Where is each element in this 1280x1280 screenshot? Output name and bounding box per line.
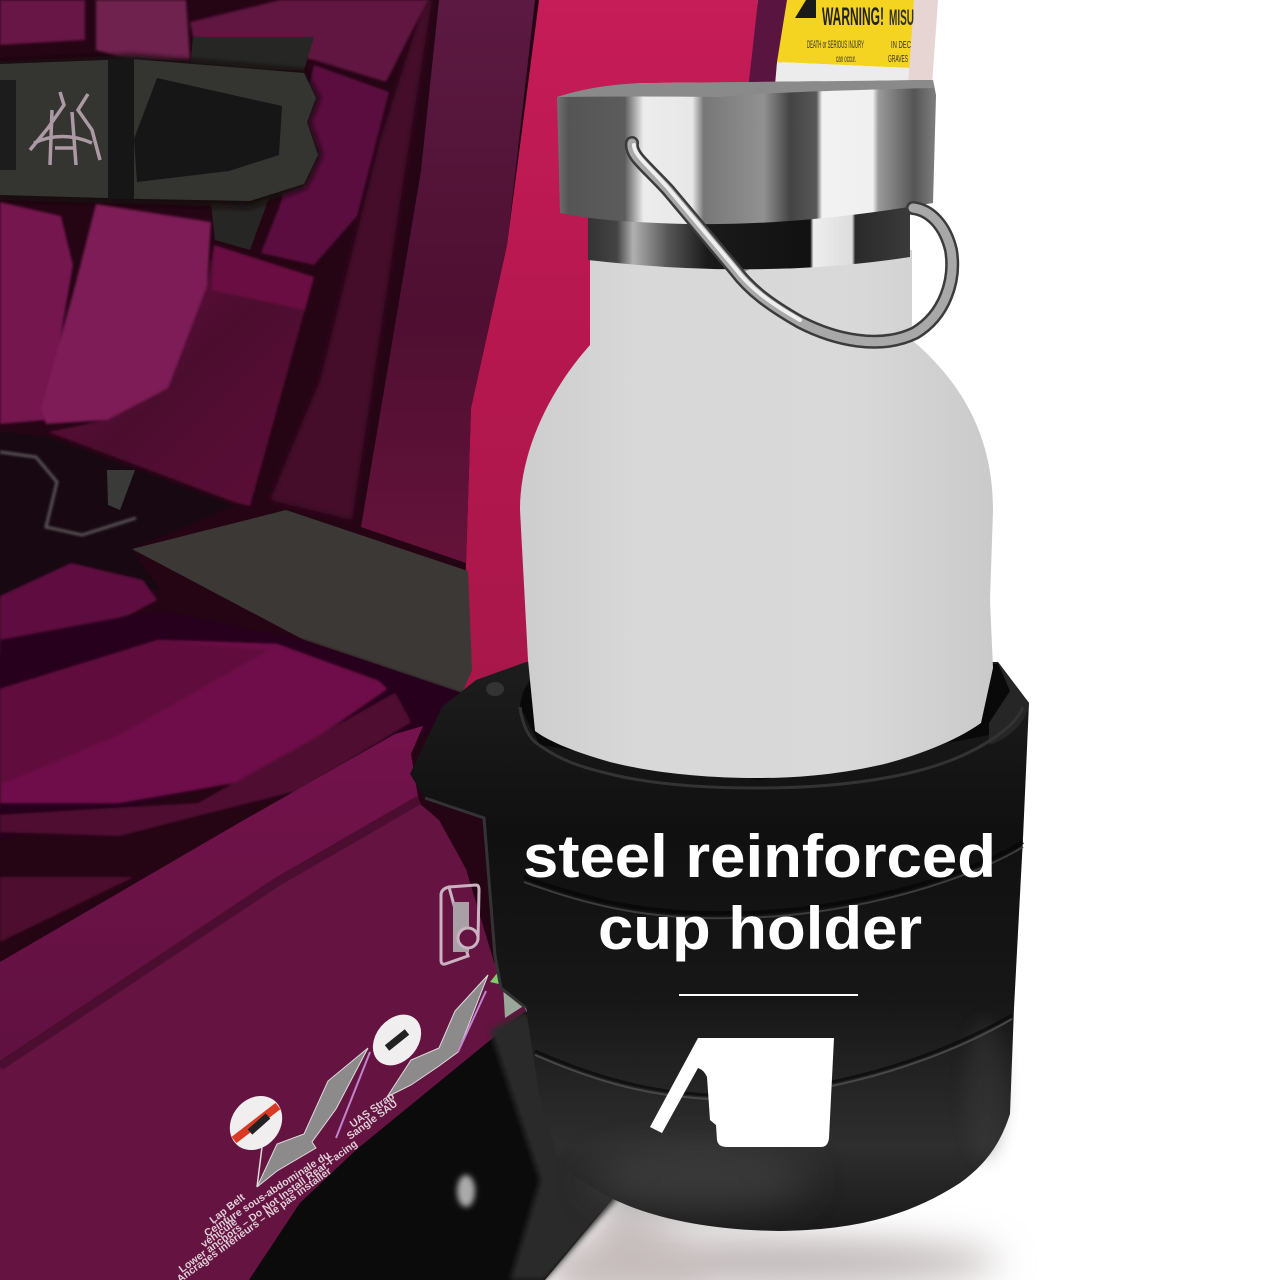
caption: steel reinforced cup holder: cup holder bbox=[598, 895, 922, 962]
panel: warning label: MISU bbox=[889, 5, 914, 30]
seat dark base shape bbox=[0, 0, 540, 1280]
panel: warning label: IN DEC bbox=[891, 40, 911, 51]
panel: warning label: WARNING! bbox=[822, 3, 884, 31]
icon: install diagram lap belt bbox=[219, 1048, 370, 1187]
panel: warning label: GRAVES bbox=[888, 54, 908, 65]
rail piping bbox=[0, 800, 419, 1066]
cup mount edge bbox=[425, 798, 526, 1008]
dark purple wedge behind label bbox=[748, 0, 790, 90]
panel: warning label: DEATH or SERIOUS INJURY bbox=[807, 39, 864, 51]
caption: steel reinforced cup holder bbox=[523, 823, 996, 962]
magenta seat wing bbox=[462, 0, 758, 700]
icon: harness figure on clip bbox=[30, 92, 100, 165]
grey webbing behind chest clip bbox=[190, 37, 314, 250]
seat label text: Sangle SAU bbox=[345, 1098, 400, 1142]
bottle lid bbox=[557, 80, 936, 224]
panel: car seat bbox=[0, 0, 790, 1280]
back of handle bbox=[722, 232, 748, 270]
seat label text: véhicule bbox=[199, 1216, 240, 1250]
seat front rail bbox=[0, 726, 423, 1069]
panel: warning label bbox=[775, 0, 938, 85]
cup inner wall right bbox=[989, 662, 1029, 745]
seat label text: Lap Belt bbox=[207, 1191, 248, 1226]
seat label text: UAS Strap bbox=[348, 1090, 397, 1130]
cup mount dimple bbox=[486, 682, 504, 696]
cup inner cavity bbox=[520, 664, 1010, 780]
cup front rim bbox=[520, 707, 1023, 788]
bottle body bbox=[520, 250, 993, 778]
floor shadow under cup holder bbox=[520, 1200, 1000, 1280]
divider line bbox=[679, 994, 858, 996]
seat belt webbing bbox=[132, 510, 472, 693]
lower pad bbox=[0, 563, 157, 655]
bottle ring bbox=[588, 200, 910, 269]
inner side fold bbox=[270, 0, 432, 520]
upper padding panels bbox=[0, 0, 428, 265]
black seat base bbox=[249, 1011, 620, 1280]
icon: cup on seat bbox=[441, 885, 479, 964]
seat front base bbox=[0, 803, 526, 1280]
seat label text: Ceinture sous-abdominale du bbox=[202, 1149, 332, 1240]
chest clip bbox=[0, 55, 322, 208]
seat side panel bbox=[361, 0, 535, 563]
panel: black cup holder body bbox=[410, 662, 1029, 1231]
cup grooves bbox=[524, 842, 1023, 1099]
bottle handle bbox=[632, 143, 952, 342]
shoulder pads bbox=[0, 202, 314, 506]
icon: install diagram lower anchors bbox=[363, 972, 525, 1097]
icon: cup holder bbox=[650, 1038, 834, 1147]
warning triangle bbox=[795, 0, 816, 18]
panel: water bottle bbox=[520, 80, 993, 778]
seat label text: Lower anchors – Do Not Install Rear-Facing bbox=[177, 1138, 360, 1275]
seat cushion bbox=[0, 610, 462, 942]
seat label text bbox=[175, 1090, 400, 1280]
caption: steel reinforced cup holder: steel reinforced bbox=[523, 823, 996, 890]
panel: warning label: can occur. bbox=[836, 54, 856, 65]
buckle area bbox=[0, 432, 234, 600]
lower cup highlights bbox=[590, 1148, 810, 1212]
